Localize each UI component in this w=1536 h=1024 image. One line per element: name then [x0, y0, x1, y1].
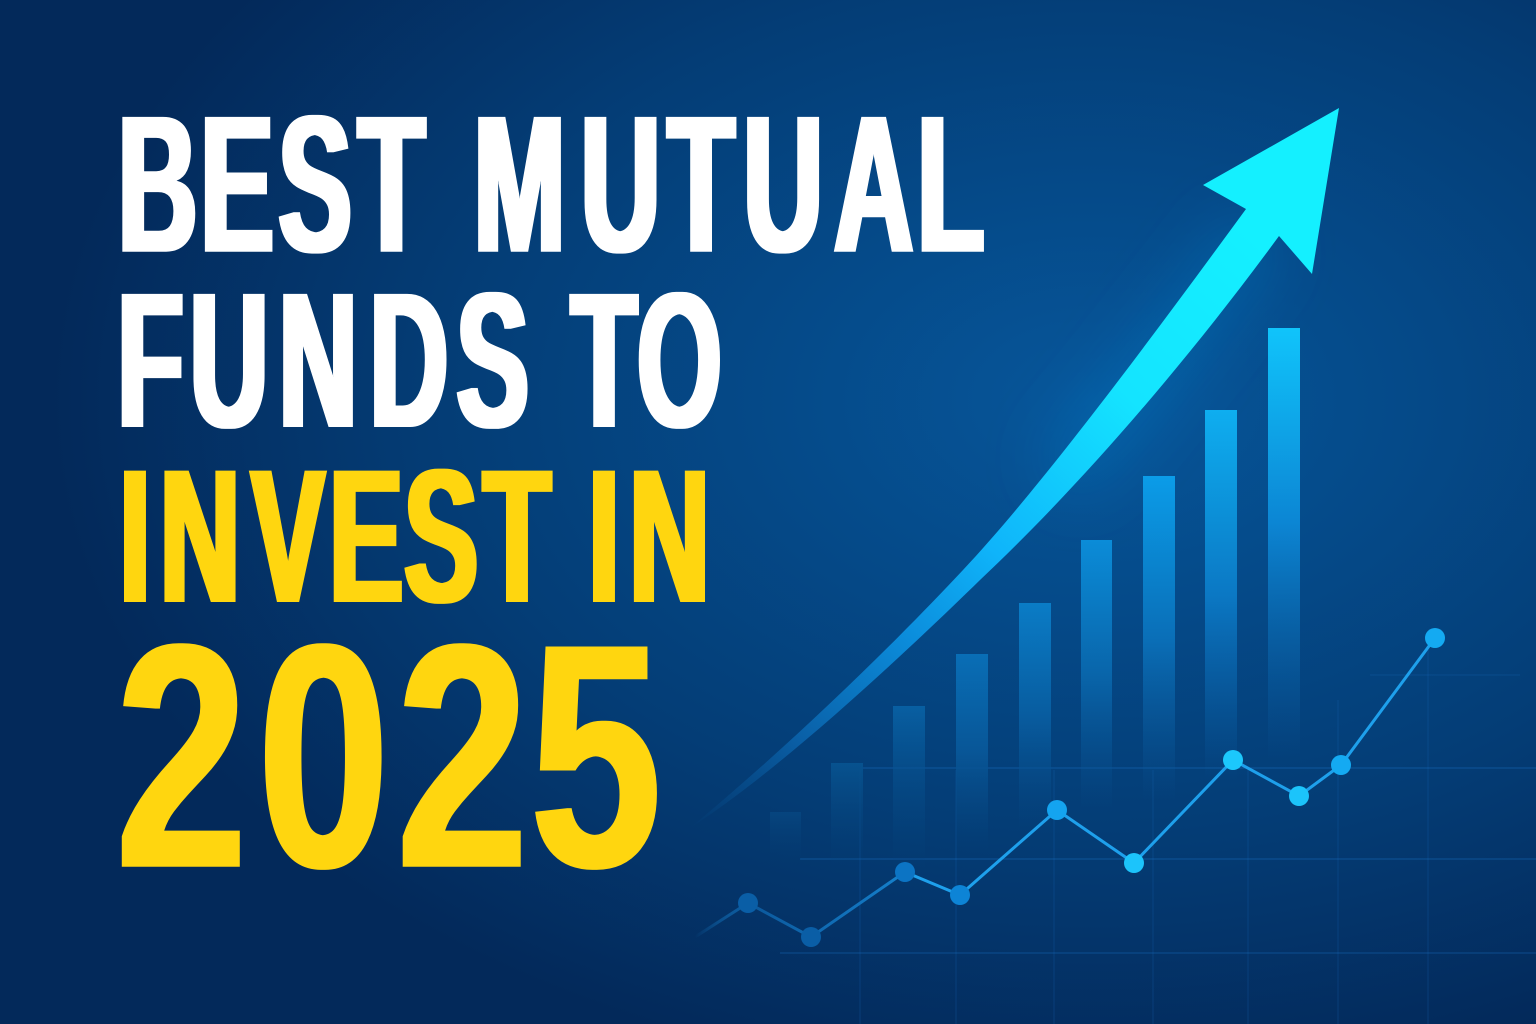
title line: best mutual funds: FUNDS TO: [117, 253, 722, 469]
icon: rising arrow: [690, 108, 1339, 828]
data points: [738, 628, 1445, 947]
line chart: [695, 628, 1445, 947]
grid lines: [780, 640, 1536, 1024]
arrow glow: [1060, 230, 1260, 480]
title line: invest in: INVEST IN: [120, 431, 709, 644]
bar chart: [770, 328, 1300, 870]
title line: best mutual funds: BEST MUTUAL: [118, 74, 984, 294]
title: [116, 74, 984, 935]
title line: best mutual funds: [117, 74, 984, 469]
title line: 2025: 2025: [116, 577, 662, 935]
